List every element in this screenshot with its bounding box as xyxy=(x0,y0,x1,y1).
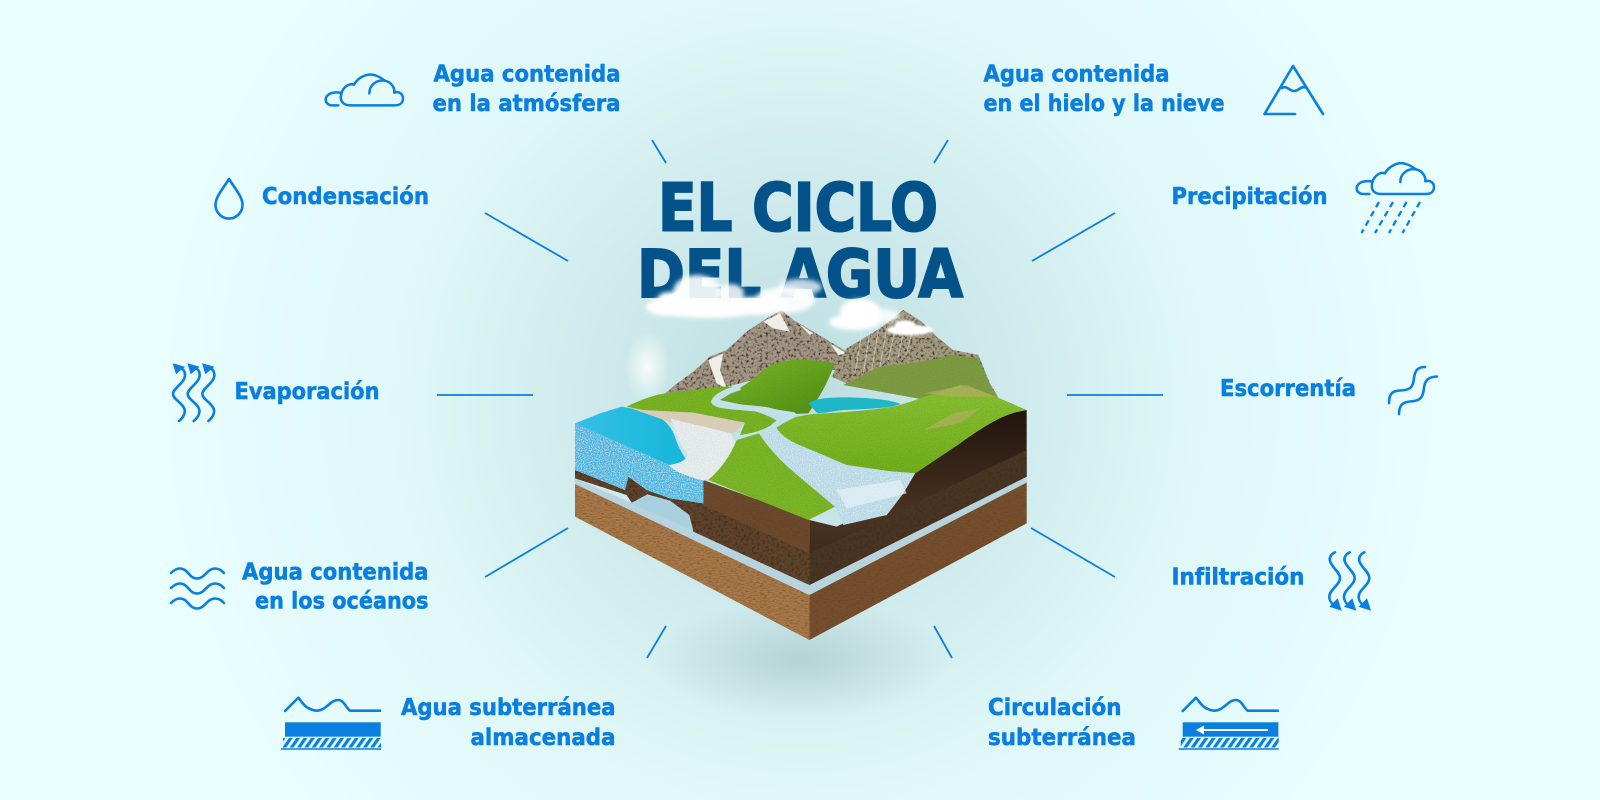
label: en el hielo y la nieve xyxy=(984,91,1224,117)
lake xyxy=(808,397,901,413)
grass left xyxy=(627,387,777,435)
label: Agua contenida xyxy=(434,62,620,88)
dry patches xyxy=(923,385,997,430)
back cloud on the right peak xyxy=(887,320,933,335)
label: Escorrentía xyxy=(1220,376,1356,402)
title: DEL AGUA xyxy=(637,236,963,313)
bottom soil left face xyxy=(575,483,809,640)
label: Agua contenida xyxy=(242,560,428,586)
bottom soil right face xyxy=(809,482,1027,640)
icon: water drop xyxy=(216,179,242,218)
label: Condensación xyxy=(262,184,429,210)
foam xyxy=(668,418,736,481)
icon: rain cloud xyxy=(1357,163,1434,233)
label: Evaporación xyxy=(234,379,380,405)
beach sand xyxy=(627,407,745,433)
groundwater layer xyxy=(575,476,1027,595)
label: en los océanos xyxy=(255,588,428,614)
icon: mountain xyxy=(1264,66,1323,114)
item: agua en la atmosfera xyxy=(326,62,620,117)
label: almacenada xyxy=(470,725,616,751)
item: agua subterranea almacenada xyxy=(281,695,616,751)
item: condensacion xyxy=(216,179,429,218)
item: evaporacion xyxy=(173,363,380,421)
river wide section xyxy=(760,427,915,525)
label: Infiltración xyxy=(1172,564,1304,590)
river xyxy=(714,387,793,427)
item: agua en los oceanos xyxy=(171,560,428,614)
item: precipitacion xyxy=(1172,163,1434,233)
left mountain xyxy=(663,310,847,395)
label: en la atmósfera xyxy=(432,91,620,117)
title: EL CICLO xyxy=(658,170,938,246)
soil left face xyxy=(703,480,809,553)
icon: stored groundwater xyxy=(281,698,381,749)
label: Agua subterránea xyxy=(401,695,616,721)
icon: groundwater flow xyxy=(1179,698,1279,749)
title xyxy=(637,170,963,313)
item: infiltracion xyxy=(1172,552,1371,611)
label: Precipitación xyxy=(1172,184,1328,210)
label: Agua contenida xyxy=(984,62,1170,88)
right soil face xyxy=(809,410,1027,585)
icon: cloud xyxy=(326,75,403,105)
front grass xyxy=(708,433,835,520)
item: circulacion subterranea xyxy=(988,695,1279,751)
sea surface xyxy=(575,407,703,480)
terrain block xyxy=(575,310,1027,640)
icon: runoff curves xyxy=(1389,367,1437,414)
right grass xyxy=(776,385,1027,473)
rain streaks xyxy=(855,328,912,373)
clouds xyxy=(646,275,900,330)
rock under sea xyxy=(575,470,809,585)
right mountain xyxy=(832,310,1000,400)
icon: rising wavy arrows xyxy=(173,363,214,421)
sea front face xyxy=(575,423,703,503)
radial connector lines xyxy=(437,140,1163,658)
label: Circulación xyxy=(988,695,1122,721)
icon: sinking wavy arrows xyxy=(1329,552,1371,611)
item: agua en el hielo y la nieve xyxy=(984,62,1323,117)
block shadow xyxy=(650,600,950,720)
icon: waves xyxy=(171,568,224,608)
center hill xyxy=(720,360,835,414)
item: escorrentia xyxy=(1220,367,1437,414)
steam column xyxy=(625,330,670,403)
label: subterránea xyxy=(988,725,1136,751)
